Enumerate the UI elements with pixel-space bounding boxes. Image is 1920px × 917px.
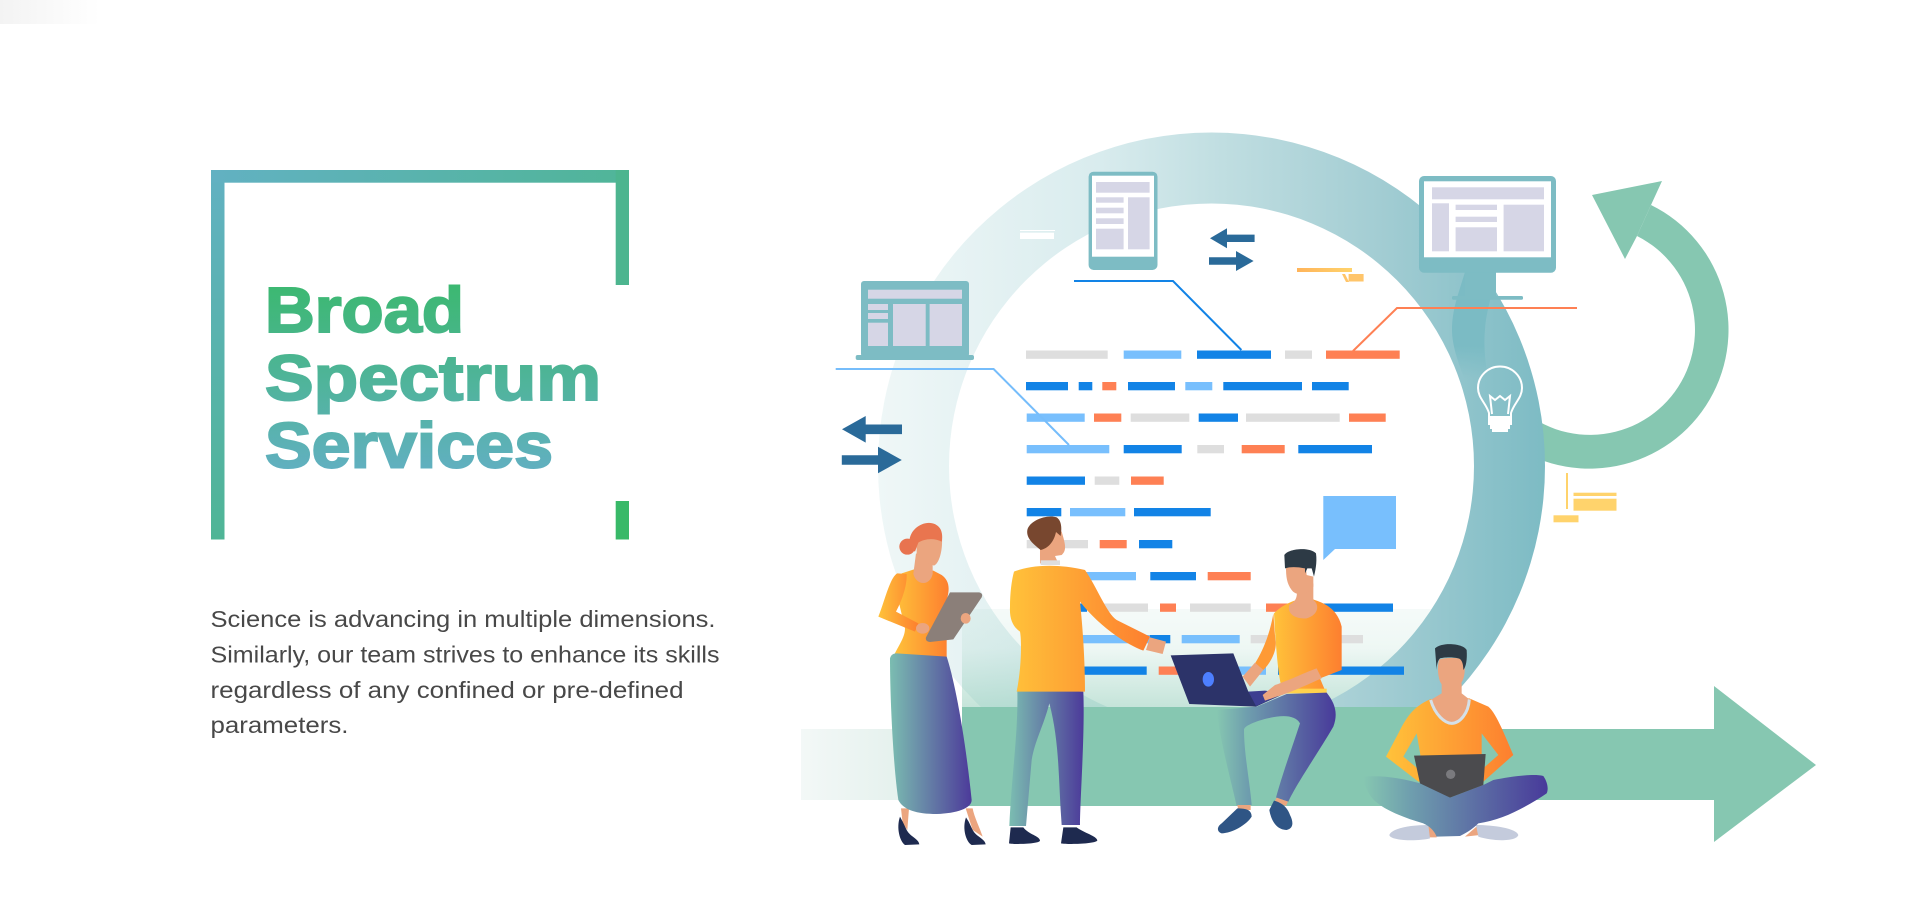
stand shadow: [1452, 272, 1496, 378]
body text: regardless of any confined or pre-defined: [210, 677, 684, 703]
body text: Science is advancing in multiple dimensions.: [210, 606, 716, 632]
skirt: [890, 653, 972, 814]
ankles: [1427, 823, 1480, 837]
hand: [916, 623, 929, 634]
body text: parameters.: [210, 712, 348, 738]
left arm: [878, 573, 918, 632]
face: [917, 539, 942, 566]
pants: [1217, 693, 1336, 806]
body text: Similarly, our team strives to enhance its skills: [210, 642, 720, 668]
pants: [1009, 690, 1084, 826]
neck and chest: [1289, 583, 1317, 618]
heading: Spectrum: [265, 342, 601, 414]
icon: arrows top: [1209, 228, 1255, 271]
hair: [909, 523, 942, 552]
icon: laptop: [856, 281, 974, 360]
connector: laptop: [836, 369, 1069, 445]
laptop logo: [1203, 672, 1214, 687]
heading: Broad: [265, 274, 464, 346]
shoes: [898, 817, 986, 845]
jacket: [1010, 566, 1150, 692]
hair: [1284, 549, 1316, 577]
hand: [1146, 637, 1166, 654]
top: [894, 569, 949, 657]
body text: [210, 606, 720, 738]
arm gaps: [1403, 733, 1421, 769]
hair: [1027, 516, 1061, 550]
shirt: [1386, 698, 1513, 782]
title frame: [211, 170, 629, 540]
hand on tablet: [961, 613, 971, 624]
socks: [1389, 825, 1518, 840]
decorative white ticks: [1020, 230, 1055, 239]
circular arrow: [1500, 181, 1729, 469]
person: seated man: [1363, 644, 1548, 840]
laptop: [1414, 754, 1486, 798]
icon: light bulb: [1478, 366, 1522, 432]
heading: Services: [265, 410, 553, 482]
laptop logo: [1446, 770, 1455, 779]
laptop keyboard: [1248, 691, 1285, 706]
decorative orange marks: [1297, 268, 1364, 282]
collar: [1041, 560, 1060, 565]
legs: [1363, 775, 1548, 837]
big forward arrow: [801, 686, 1816, 842]
laptop: [1171, 653, 1285, 707]
person: standing woman: [878, 523, 986, 845]
person: man on bench: [1171, 549, 1342, 833]
shoes: [1218, 801, 1292, 833]
left arm: [1255, 613, 1276, 670]
connector: tablet: [1074, 281, 1241, 350]
decorative yellow marks: [1554, 473, 1616, 522]
icon: arrows left: [842, 416, 902, 473]
gradient floor panel: [962, 609, 1447, 707]
person: standing man: [1009, 516, 1166, 844]
ankles: [1237, 798, 1288, 810]
connector: monitor: [1353, 308, 1577, 351]
corner smudge: [0, 0, 100, 24]
icon: monitor: [1419, 176, 1556, 300]
hair bun: [899, 539, 915, 555]
tablet: [926, 592, 982, 642]
left forearm: [1243, 663, 1263, 687]
legs: [901, 808, 983, 837]
face and neck: [1040, 528, 1065, 563]
shirt: [1274, 599, 1342, 693]
ring: left half: [878, 132, 1212, 707]
icon: tablet: [1089, 172, 1158, 270]
right forearm: [1263, 668, 1322, 701]
code bars: [1026, 350, 1404, 675]
collar: [1431, 699, 1469, 723]
shoes: [1009, 827, 1097, 844]
ring: right half: [1212, 132, 1545, 707]
face: [1286, 566, 1313, 594]
speech bubble: [1323, 496, 1396, 560]
heading: [265, 274, 601, 482]
neck and chest: [1431, 683, 1469, 723]
belt: [1286, 689, 1327, 693]
neck and chest: [913, 553, 933, 583]
hair: [1435, 644, 1467, 670]
face: [1438, 658, 1465, 690]
